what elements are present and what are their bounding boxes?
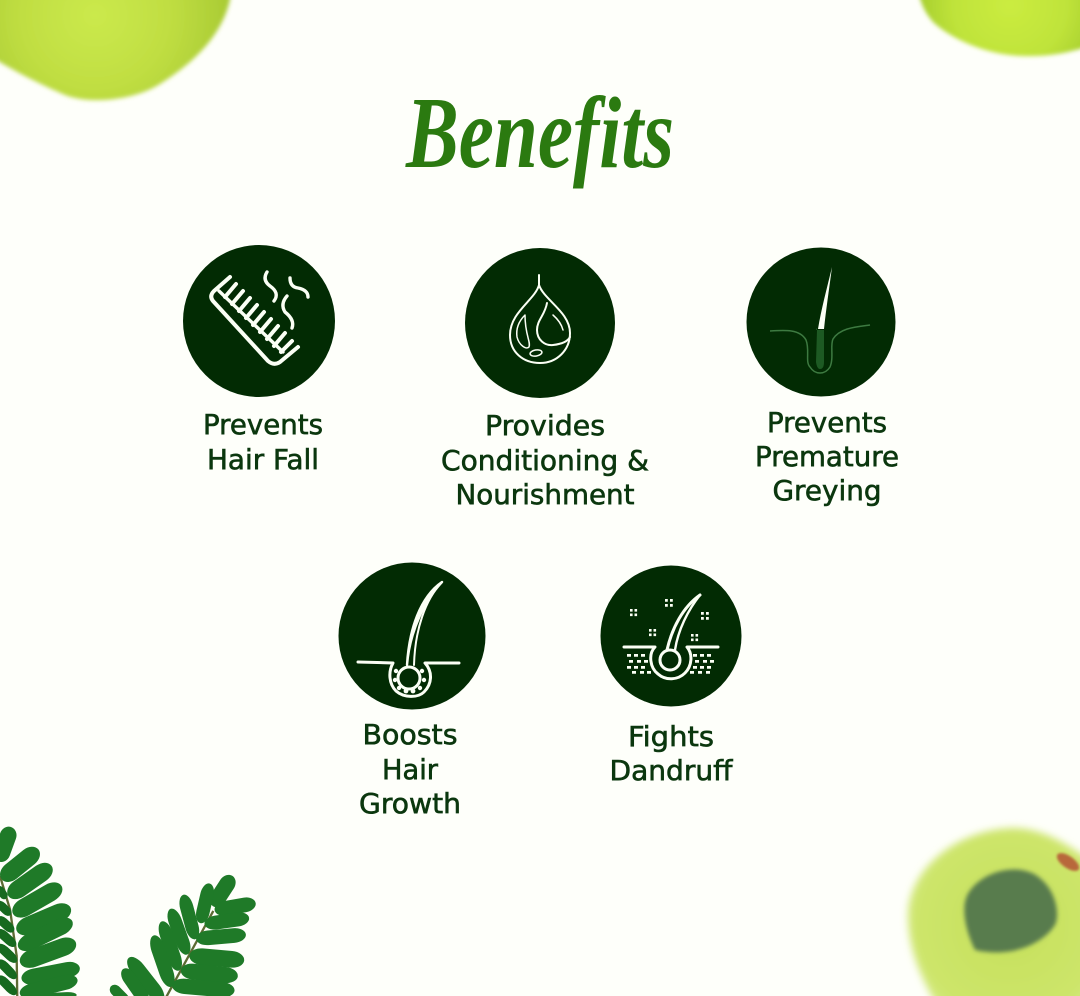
label: Boosts (362, 719, 458, 751)
seed (964, 870, 1057, 952)
label: Greying (772, 475, 882, 507)
amla fruit: bottom right, halved with seed (908, 828, 1080, 996)
label (755, 407, 899, 507)
brown spot (1054, 850, 1080, 874)
label: Dandruff (610, 755, 734, 787)
label (203, 409, 323, 476)
benefit: fights dandruff (600, 566, 742, 787)
icon: hair root with bulb (338, 562, 486, 710)
icon: scalp with dandruff flakes (600, 566, 742, 706)
label (610, 721, 734, 787)
benefit: prevents premature greying (746, 248, 899, 507)
label: Hair Fall (207, 444, 319, 476)
label: Prevents (203, 409, 323, 441)
benefit: conditioning and nourishment (441, 248, 649, 511)
fruit flesh (908, 828, 1080, 996)
benefit: boosts hair growth (338, 562, 486, 820)
label: Nourishment (456, 479, 635, 511)
icon: oil drop (465, 248, 615, 398)
label (441, 410, 649, 511)
title: Benefits (405, 77, 674, 190)
label: Provides (485, 410, 605, 442)
amla fruit: top left (0, 0, 232, 100)
icon: hair follicle with white tip (746, 248, 896, 396)
leaves: bottom left fronds (0, 824, 257, 996)
icon: comb with hair strands (183, 245, 335, 397)
label: Fights (628, 721, 714, 753)
label: Hair (382, 754, 439, 786)
label: Conditioning & (441, 445, 649, 477)
right frond (107, 872, 257, 996)
amla fruit: top right (916, 0, 1080, 56)
label (359, 719, 461, 820)
benefit: prevents hair fall (183, 245, 335, 476)
left frond (0, 824, 81, 996)
label: Prevents (767, 407, 887, 439)
label: Growth (359, 788, 461, 820)
label: Premature (755, 441, 899, 473)
